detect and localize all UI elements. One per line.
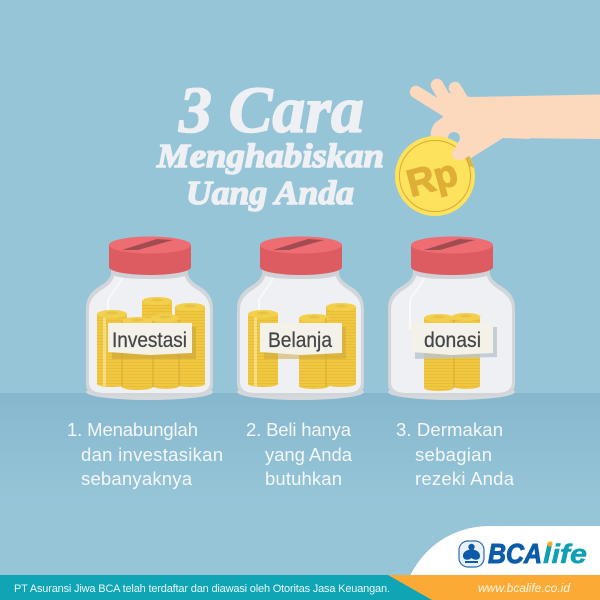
coin stacks xyxy=(424,313,480,391)
text block: tip 1: dan investasikan xyxy=(81,444,223,465)
thumb xyxy=(452,108,530,160)
website: www.bcalife.co.id xyxy=(478,581,570,595)
logo panel xyxy=(410,526,600,576)
BCA wordmark: life xyxy=(543,539,587,569)
coin stacks xyxy=(97,297,205,390)
coin: Rp xyxy=(402,152,462,206)
footer disclaimer: PT Asuransi Jiwa BCA telah terdaftar dan diawasi oleh Otoritas Jasa Keuangan. xyxy=(14,583,390,595)
coin xyxy=(395,136,475,216)
BCA wordmark xyxy=(488,538,587,569)
title xyxy=(156,74,384,212)
label: Investasi xyxy=(112,328,187,352)
icon: hand holding Rp coin xyxy=(395,85,600,216)
text block: tip 3: 3. Dermakan xyxy=(396,419,503,440)
text block: tip 2: butuhkan xyxy=(265,468,342,489)
footer bar xyxy=(0,575,600,600)
text block: tip 3: rezeki Anda xyxy=(415,468,515,489)
label xyxy=(108,323,196,359)
label xyxy=(411,323,497,359)
label: donasi xyxy=(424,328,481,352)
icon: BCA emblem xyxy=(459,541,484,567)
label xyxy=(260,323,346,359)
title: Menghabiskan xyxy=(156,138,384,175)
jar 2: Belanja xyxy=(237,236,364,400)
title: 3 Cara xyxy=(178,74,364,147)
title: Uang Anda xyxy=(186,175,354,212)
jar 3: donasi xyxy=(388,236,515,400)
jar 1: Investasi xyxy=(86,236,213,400)
BCA wordmark: BCA xyxy=(488,538,542,569)
text block: tip 2 xyxy=(246,419,353,489)
label: Belanja xyxy=(268,328,332,352)
text block: tip 2: 2. Beli hanya xyxy=(246,419,352,440)
text block: tip 3: sebagian xyxy=(415,444,492,465)
hand palm and fingers xyxy=(416,85,600,165)
text block: tip 1: 1. Menabunglah xyxy=(67,419,198,440)
coin stacks xyxy=(248,303,356,389)
text block: tip 1: sebanyaknya xyxy=(81,468,193,489)
text block: tip 3 xyxy=(396,419,515,489)
text block: tip 2: yang Anda xyxy=(265,444,353,465)
text block: tip 1 xyxy=(67,419,223,489)
